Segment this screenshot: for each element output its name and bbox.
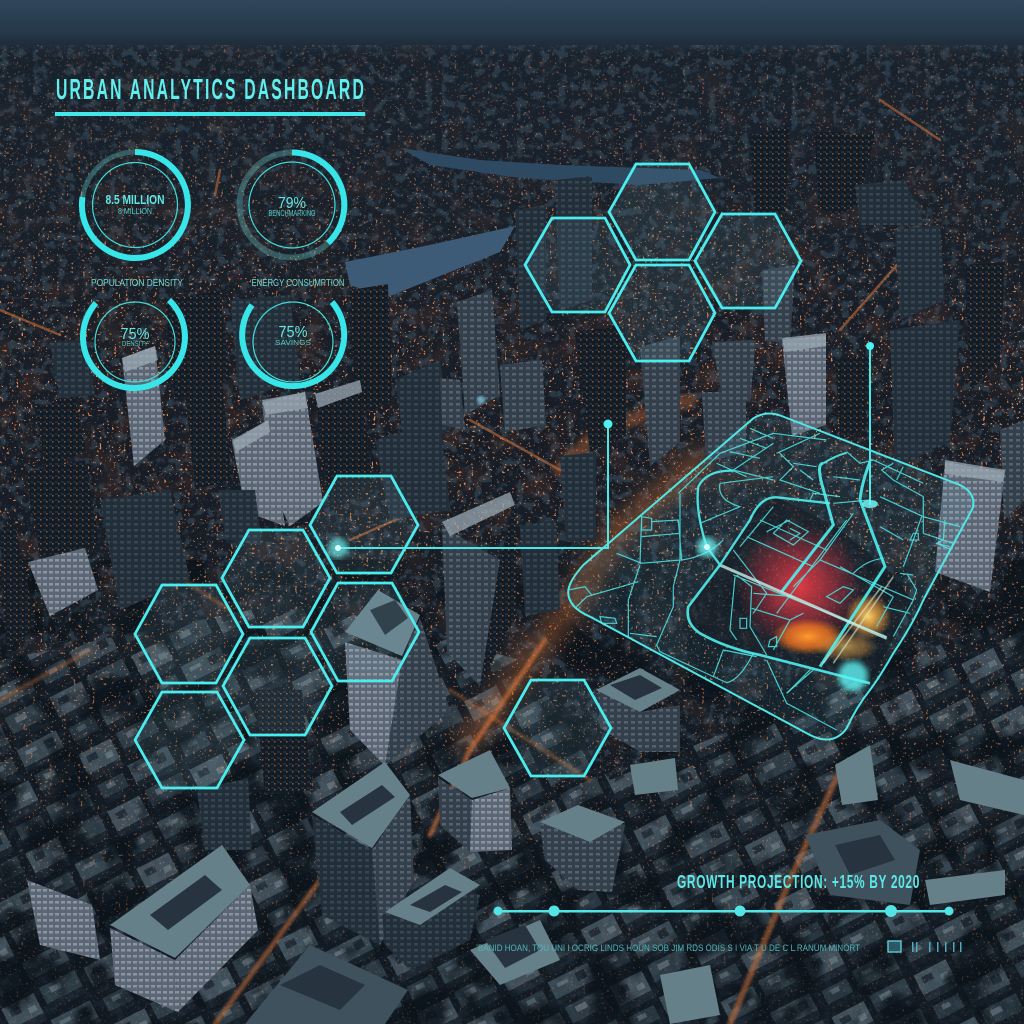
connector: left node [335, 424, 608, 548]
gauge: density: DENSITY [122, 339, 148, 348]
timeline [494, 905, 954, 917]
gauge: density: 75% [120, 326, 150, 343]
hex cluster: lower left [135, 476, 419, 788]
city map overlay [568, 413, 973, 740]
label: energy consumption: ENERGY CONSUMPTION [252, 277, 344, 289]
gauge: population: 8 MILLION [118, 206, 152, 216]
hex: single centre [504, 680, 611, 776]
small scale widget [888, 941, 962, 952]
gauge: consumption: 75% [278, 324, 308, 341]
label: population density: POPULATION DENSITY [91, 277, 183, 289]
gauge: benchmarking: BENCHMARKING [268, 209, 316, 218]
footnote text: BANID HOAN, TOU UNI I OCRIG LINDS HOUN SOB JIM RDS ODIS S I VIA T U DE C L RANUM MINORT [478, 943, 860, 953]
gauge: density [83, 300, 185, 388]
gauge: benchmarking: 79% [278, 195, 306, 212]
connector: right node [869, 346, 871, 505]
gauge: consumption: SAVINGS [275, 338, 311, 347]
title: URBAN ANALYTICS DASHBOARD [56, 74, 366, 106]
connector lines and nodes [328, 342, 878, 691]
gauge: population [82, 152, 188, 258]
gauge: benchmarking [240, 152, 344, 258]
title [55, 74, 366, 116]
hex cluster: upper right [525, 164, 801, 361]
gauge: consumption [242, 302, 344, 386]
gauge: population: 8.5 MILLION [106, 193, 164, 207]
